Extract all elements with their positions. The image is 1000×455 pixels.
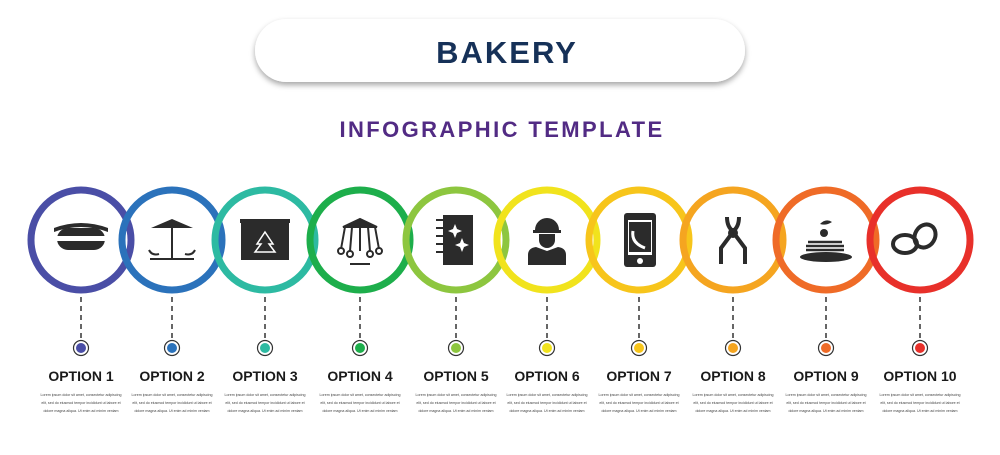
title pill: BAKERY [436, 35, 578, 70]
circle ring chain [31, 190, 970, 290]
title pill [255, 19, 745, 82]
description texts: dolore magna aliqua. Ut enim ad minim veniam [134, 409, 210, 413]
description texts: dolore magna aliqua. Ut enim ad minim veniam [322, 409, 398, 413]
connectors and dots [81, 297, 920, 339]
description texts: elit, sed do eiusmod tempor incididunt ut labore et [507, 401, 587, 405]
description texts: dolore magna aliqua. Ut enim ad minim veniam [601, 409, 677, 413]
subtitle: INFOGRAPHIC TEMPLATE [339, 117, 665, 142]
description texts: elit, sed do eiusmod tempor incididunt ut labore et [880, 401, 960, 405]
description texts: Lorem ipsum dolor sit amet, consectetur adipiscing [786, 393, 866, 397]
option labels [48, 368, 957, 384]
description texts: Lorem ipsum dolor sit amet, consectetur adipiscing [41, 393, 121, 397]
description texts: dolore magna aliqua. Ut enim ad minim veniam [882, 409, 958, 413]
icon: pasta [800, 220, 852, 262]
description texts: elit, sed do eiusmod tempor incididunt ut labore et [693, 401, 773, 405]
icon: swing ride [338, 219, 382, 264]
option labels: OPTION 7 [606, 368, 672, 384]
icon: carousel [149, 219, 195, 260]
description texts: Lorem ipsum dolor sit amet, consectetur adipiscing [693, 393, 773, 397]
description texts [41, 393, 960, 413]
icon: notebook [436, 215, 473, 265]
option labels: OPTION 5 [423, 368, 489, 384]
description texts: dolore magna aliqua. Ut enim ad minim veniam [509, 409, 585, 413]
icon: worker [528, 218, 566, 265]
description texts: elit, sed do eiusmod tempor incididunt ut labore et [599, 401, 679, 405]
option labels: OPTION 1 [48, 368, 114, 384]
description texts: elit, sed do eiusmod tempor incididunt ut labore et [320, 401, 400, 405]
icon: pliers [721, 217, 745, 264]
description texts: dolore magna aliqua. Ut enim ad minim veniam [788, 409, 864, 413]
description texts: Lorem ipsum dolor sit amet, consectetur adipiscing [507, 393, 587, 397]
icon: hot dog [54, 223, 108, 250]
description texts: Lorem ipsum dolor sit amet, consectetur adipiscing [320, 393, 400, 397]
option labels: OPTION 10 [883, 368, 957, 384]
option labels: OPTION 9 [793, 368, 859, 384]
description texts: dolore magna aliqua. Ut enim ad minim veniam [227, 409, 303, 413]
description texts: Lorem ipsum dolor sit amet, consectetur adipiscing [880, 393, 960, 397]
description texts: elit, sed do eiusmod tempor incididunt ut labore et [786, 401, 866, 405]
description texts: Lorem ipsum dolor sit amet, consectetur adipiscing [416, 393, 496, 397]
icon: bread rolls [893, 221, 940, 253]
icon: calendar tree [240, 219, 290, 260]
description texts: Lorem ipsum dolor sit amet, consectetur adipiscing [225, 393, 305, 397]
option labels: OPTION 2 [139, 368, 205, 384]
description texts: elit, sed do eiusmod tempor incididunt ut labore et [132, 401, 212, 405]
description texts: Lorem ipsum dolor sit amet, consectetur adipiscing [132, 393, 212, 397]
option labels: OPTION 6 [514, 368, 580, 384]
description texts: dolore magna aliqua. Ut enim ad minim veniam [418, 409, 494, 413]
description texts: elit, sed do eiusmod tempor incididunt ut labore et [416, 401, 496, 405]
option labels: OPTION 3 [232, 368, 298, 384]
description texts: elit, sed do eiusmod tempor incididunt ut labore et [41, 401, 121, 405]
description texts: dolore magna aliqua. Ut enim ad minim veniam [43, 409, 119, 413]
description texts: Lorem ipsum dolor sit amet, consectetur adipiscing [599, 393, 679, 397]
icon: phone [624, 213, 656, 267]
description texts: dolore magna aliqua. Ut enim ad minim veniam [695, 409, 771, 413]
description texts: elit, sed do eiusmod tempor incididunt ut labore et [225, 401, 305, 405]
option labels: OPTION 4 [327, 368, 393, 384]
option labels: OPTION 8 [700, 368, 766, 384]
